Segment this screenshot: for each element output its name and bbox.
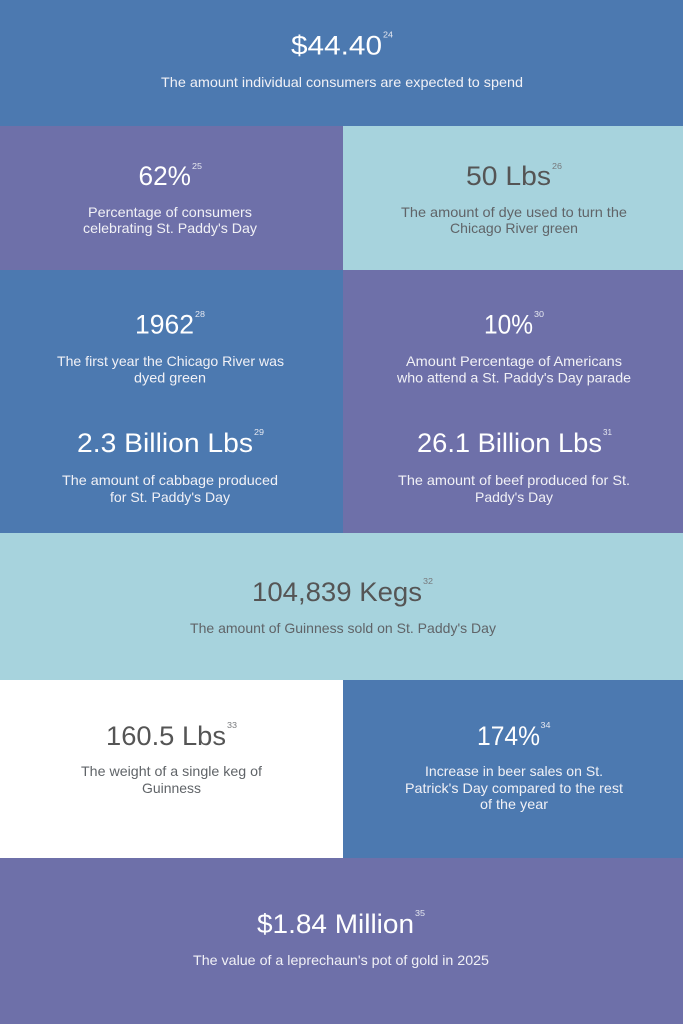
panel: consumers celebrating xyxy=(0,126,343,270)
description: cabbage: for St. Paddy's Day xyxy=(110,489,230,505)
stat: 26.1 Billion Lbs: 31 xyxy=(603,428,613,437)
stat: 10%: 10% xyxy=(484,310,533,340)
panel: pot of gold xyxy=(0,858,683,1024)
description: keg weight: Guinness xyxy=(142,780,201,796)
description: consumer spending: The amount individual consumers are expected to spend xyxy=(161,74,523,90)
stat: 2.3 Billion Lbs: 29 xyxy=(254,428,265,437)
panel: parade and beef xyxy=(343,270,683,533)
stat: 50 Lbs: 50 Lbs xyxy=(466,161,551,191)
stat: 174%: 34 xyxy=(540,721,551,730)
description: Guinness sold: The amount of Guinness sold on St. Paddy's Day xyxy=(190,620,496,636)
description: consumers celebrating xyxy=(83,204,257,236)
description: pot of gold: The value of a leprechaun's pot of gold in 2025 xyxy=(193,952,489,968)
description: cabbage: The amount of cabbage produced xyxy=(62,472,278,488)
stat: $44.40: 24 xyxy=(383,30,394,40)
stat: 10%: 30 xyxy=(534,310,545,319)
stat: 1962: 28 xyxy=(195,310,206,319)
description: beer sales: of the year xyxy=(480,796,548,812)
stat: 2.3 Billion Lbs: 2.3 Billion Lbs xyxy=(77,428,253,458)
stat: 104,839 Kegs: 104,839 Kegs xyxy=(252,577,422,607)
description: cabbage xyxy=(62,472,278,505)
stat: 62%: 25 xyxy=(192,162,203,171)
stat: $1.84 Million: 35 xyxy=(415,909,426,918)
stat: $44.40: $44.40 xyxy=(291,30,382,60)
panel: river year and cabbage xyxy=(0,270,343,533)
stat: 50 Lbs: 26 xyxy=(552,162,563,171)
description: first dyed year: The first year the Chicago River was xyxy=(57,353,284,369)
panel: beer sales xyxy=(343,680,683,858)
description: parade: Amount Percentage of Americans xyxy=(406,353,622,369)
description: beef: The amount of beef produced for St. xyxy=(398,472,630,488)
stat: 160.5 Lbs: 33 xyxy=(227,721,238,730)
description: river dye: The amount of dye used to turn the xyxy=(401,204,627,220)
description: first dyed year xyxy=(57,353,284,386)
description: river dye: Chicago River green xyxy=(450,220,578,236)
description: parade xyxy=(396,353,631,386)
description: beer sales: Increase in beer sales on St. xyxy=(425,763,603,779)
description: keg weight xyxy=(81,763,262,796)
description: beer sales xyxy=(405,763,623,812)
description: first dyed year: dyed green xyxy=(134,370,206,386)
stat: 62%: 62% xyxy=(138,161,191,191)
description: consumers celebrating: celebrating St. Paddy's Day xyxy=(83,220,257,236)
stat: 174%: 174% xyxy=(477,721,540,751)
stat: 26.1 Billion Lbs: 26.1 Billion Lbs xyxy=(417,428,602,458)
stat: 104,839 Kegs: 32 xyxy=(423,577,434,586)
description: consumers celebrating: Percentage of consumers xyxy=(88,204,252,220)
stat: $1.84 Million: $1.84 Million xyxy=(257,909,414,939)
panel: river dye xyxy=(343,126,683,270)
panel: consumer spending xyxy=(0,0,683,126)
description: keg weight: The weight of a single keg of xyxy=(81,763,262,779)
stat: 1962: 1962 xyxy=(135,310,194,340)
description: parade: who attend a St. Paddy's Day parade xyxy=(396,370,631,386)
description: beef xyxy=(398,472,630,505)
description: beef: Paddy's Day xyxy=(475,489,553,505)
stat: 160.5 Lbs: 160.5 Lbs xyxy=(106,721,226,751)
description: river dye xyxy=(401,204,627,236)
panel: Guinness kegs xyxy=(0,533,683,680)
panel: keg weight xyxy=(0,680,343,858)
description: beer sales: Patrick's Day compared to the rest xyxy=(405,780,623,796)
